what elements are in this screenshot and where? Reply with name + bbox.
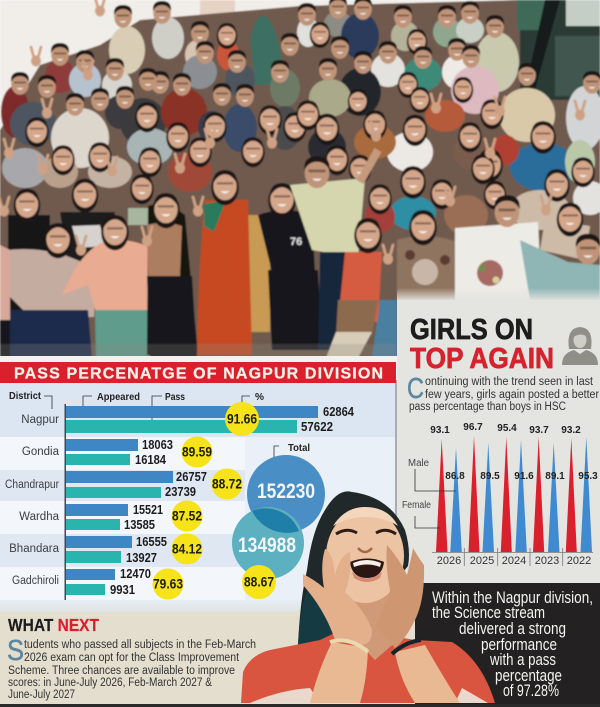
column labels: Pass [165,391,185,403]
axis and year labels: 2024 [502,555,526,567]
female values [430,422,581,436]
Nagpur: Nagpur [21,414,59,426]
legend: Male [408,458,429,469]
Gadchiroli: Gadchiroli [12,575,59,587]
woman in black tee [258,210,315,272]
Wardha: 15521 [133,502,163,517]
Bhandara: 16555 [136,534,167,549]
spike chart [402,422,598,567]
total circles [232,442,325,579]
column labels: % [255,391,265,403]
column labels: Appeared [97,391,140,403]
Bhandara: Bhandara [9,543,60,555]
male values: 86.8 [445,471,465,482]
eyes [336,530,396,534]
chart title banner: PASS PERCENATGE OF NAGPUR DIVISION [14,366,383,382]
axis and year labels: 2023 [535,555,559,567]
Wardha: Wardha [19,511,60,523]
bottom rule [0,704,600,707]
Wardha: 13585 [124,517,155,532]
axis and year labels: 2022 [567,555,591,567]
woman in peach shirt [62,240,152,315]
photo: students celebrating [0,0,600,360]
panel: pass percentage chart [0,362,397,612]
male values: 89.1 [545,471,565,482]
nose [358,548,372,552]
male values: 95.3 [578,471,598,482]
mouth [350,558,384,578]
yellow percentage circles: 79.63 [153,576,183,592]
panel: science stream callout [415,583,600,704]
Chandrapur: 26757 [176,469,207,484]
heading: TOP AGAIN [410,343,554,375]
man in pale shirt [290,178,365,258]
Wardha [19,502,163,532]
Gadchiroli [12,566,151,597]
Nagpur: 57622 [301,419,333,434]
raised v-sign hands [0,0,585,264]
body text: Scheme. Three chances are available to improve [8,665,235,677]
panel: science stream callout: the Science stream [432,604,545,622]
Chandrapur: Chandrapur [5,479,59,491]
chart axis [64,404,66,600]
Nagpur: 62864 [323,404,355,419]
body text: June-July 2027 [8,689,75,701]
total circles: 152230 [257,480,315,503]
icon: woman silhouette [562,327,598,365]
shirt [241,628,495,703]
left hand [303,549,372,645]
yellow percentage circles: 84.12 [172,542,202,556]
heading: WHAT NEXT [8,615,99,635]
chart background rows [0,380,397,612]
front row women and men [0,0,600,358]
woman right [540,220,590,260]
Total label: Total [288,442,310,454]
female spikes [436,436,577,552]
intro text: C [407,373,424,405]
yellow percentage circles: 89.59 [182,444,212,460]
woman in mauve top [8,249,97,317]
axis and year labels: 2026 [437,555,461,567]
beige saree behind [248,214,272,333]
body text: tudents who passed all subjects in the Feb-March [24,639,256,651]
panel: science stream callout: delivered a strong [459,620,566,638]
male spikes [450,437,592,552]
yellow percentage circles: 91.66 [227,412,257,426]
female values: 96.7 [463,422,483,433]
male values: 89.5 [480,471,500,482]
panel: girls on top again [397,288,600,590]
man in teal [520,240,600,300]
woman in pattern dress [396,236,455,300]
middle row people [2,88,600,235]
Gondia: 16184 [135,452,167,467]
photo: shouting girl [241,491,495,703]
intro text: pass percentage than boys in HSC [409,401,566,413]
back row people [1,11,600,150]
axis and year labels: 2025 [470,555,494,567]
panel: what next [0,612,420,704]
axis and year labels [432,548,593,567]
Nagpur [21,404,355,434]
panel: science stream callout: performance [481,636,557,654]
female values: 93.7 [529,425,549,436]
saree woman [197,200,252,355]
man with bouquet [455,222,542,300]
face [326,509,404,603]
female values: 93.2 [561,425,581,436]
column labels [9,390,265,428]
body text: S [7,635,24,667]
column labels: District [9,390,41,402]
female values: 93.1 [430,425,450,436]
yellow percentage circles: 88.67 [244,574,274,590]
front row women and men: 76 [290,236,302,248]
female values: 95.4 [497,423,517,434]
body text: 2026 exam can opt for the Class Improvement [24,652,240,664]
Gondia: Gondia [22,446,60,458]
body text [7,635,256,701]
hair [298,491,409,650]
right hand [375,545,424,648]
forearms [310,642,368,703]
Gondia [22,437,173,467]
bracelets [330,640,368,652]
Bhandara [9,534,167,565]
Bhandara: 13927 [126,550,157,565]
panel: science stream callout: of 97.28% [503,682,559,700]
intro text [407,373,599,413]
yellow percentage circles: 87.52 [172,508,202,524]
body text: scores: in June-July 2026, Feb-March 2027 & [8,677,212,689]
bars [5,404,355,597]
white gap under photo [0,356,397,363]
neck [350,590,398,660]
woman in orange [338,252,382,322]
black shirts row [8,215,50,320]
heading [410,314,554,375]
Chandrapur: 23739 [165,484,196,499]
panel: science stream callout: percentage [495,667,562,685]
woman in tan top [147,204,198,355]
middle row heads [25,99,595,214]
male values: 91.6 [514,471,534,482]
male values [445,471,598,482]
back row heads [11,0,600,116]
Gondia: 18063 [142,437,173,452]
Gadchiroli: 9931 [110,582,135,597]
Gadchiroli: 12470 [120,566,151,581]
legend [402,458,456,528]
intro text: ontinuing with the trend seen in last [425,376,594,388]
Chandrapur [5,469,207,499]
legend: Female [402,500,431,511]
yellow percentage circles: 88.72 [212,476,242,492]
yellow percentage circles [152,402,276,600]
panel: science stream callout: with a pass [489,651,556,669]
heading: GIRLS ON [410,314,533,346]
total circles: 134988 [238,534,296,557]
